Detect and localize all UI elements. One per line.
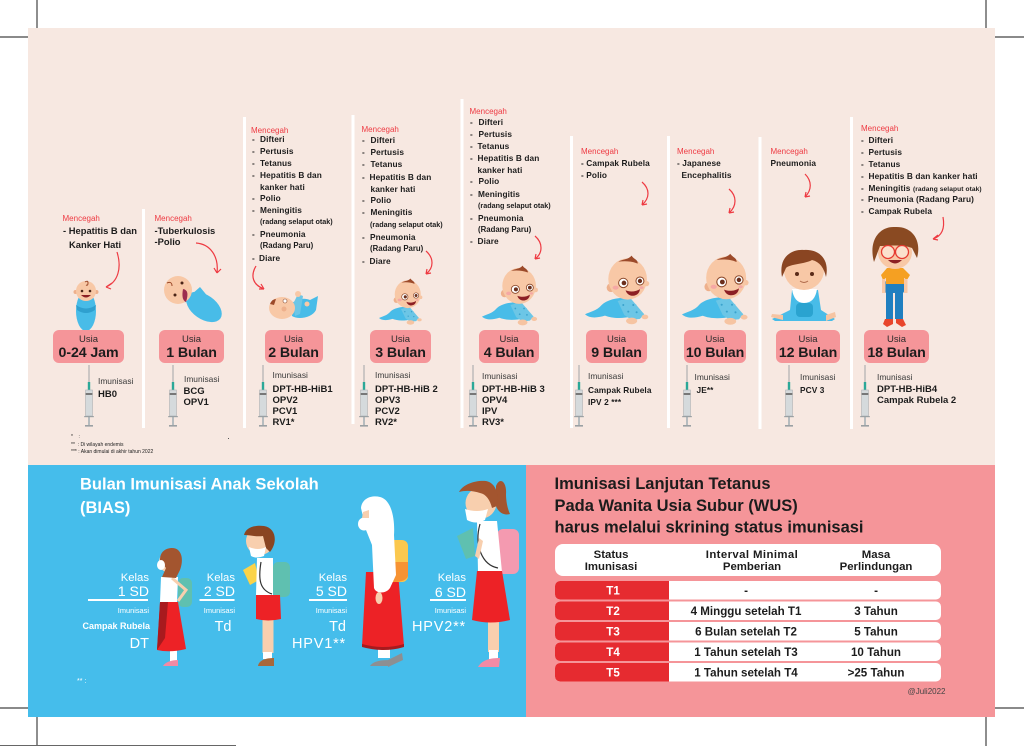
row T5: 1 Tahun setelah T4 xyxy=(694,666,798,680)
column: 3 Bulan: Usia xyxy=(391,334,411,345)
table header: Pemberian xyxy=(723,561,781,573)
age badge xyxy=(479,330,539,363)
row T3: T3 xyxy=(606,626,620,638)
column: 9 Bulan: Mencegah xyxy=(581,147,618,156)
column: 10 Bulan: 10 Bulan xyxy=(686,345,744,361)
row T4: T4 xyxy=(606,646,620,659)
column: 12 Bulan: 12 Bulan xyxy=(779,345,837,361)
column: 9 Bulan: - Campak Rubela xyxy=(581,158,650,168)
column: 3 Bulan: Tetanus xyxy=(370,159,403,169)
kelas 5 SD: Imunisasi xyxy=(316,606,347,615)
panel: jadwal imunisasi bayi xyxy=(28,28,995,465)
kelas 6 SD: 6 SD xyxy=(435,584,466,600)
column: 4 Bulan: kanker hati xyxy=(478,165,522,175)
column: 18 Bulan: Usia xyxy=(887,334,907,345)
column: 3 Bulan: OPV3 xyxy=(375,395,400,406)
column: 2 Bulan: 2 Bulan xyxy=(268,345,319,361)
kelas 1 SD: Campak Rubela xyxy=(82,621,151,631)
column: 1 Bulan: BCG xyxy=(184,386,205,397)
column: 2 Bulan: Usia xyxy=(284,334,304,345)
row T1: - xyxy=(744,584,748,598)
icon: crawling baby xyxy=(482,266,538,325)
column dividers xyxy=(142,99,853,429)
column: 10 Bulan: Usia xyxy=(705,334,725,345)
arrow xyxy=(196,243,221,273)
figure: siswi kelas 1 xyxy=(157,548,192,666)
arrow xyxy=(642,182,648,205)
column: 18 Bulan: Tetanus xyxy=(868,159,901,169)
column: 2 Bulan: - xyxy=(252,146,255,156)
column: 10 Bulan: Mencegah xyxy=(677,147,714,156)
column: 4 Bulan: Meningitis xyxy=(478,189,520,199)
column: 2 Bulan: Diare xyxy=(259,253,281,263)
column: 9 Bulan: 9 Bulan xyxy=(591,345,642,361)
column: 3 Bulan: (radang selaput otak) xyxy=(370,220,443,229)
column: 2 Bulan: - xyxy=(252,253,255,263)
column: 3 Bulan: Mencegah xyxy=(362,125,399,134)
kelas 1 SD: DT xyxy=(130,636,149,652)
column: 0-24 Jam: Usia xyxy=(79,334,99,345)
column: 18 Bulan: Mencegah xyxy=(861,124,898,133)
column: 3 Bulan: Imunisasi xyxy=(375,370,411,380)
kelas 2 SD xyxy=(200,572,235,635)
column: 0-24 Jam: HB0 xyxy=(98,389,117,400)
kelas 1 SD: 1 SD xyxy=(118,583,149,599)
column: 10 Bulan xyxy=(677,147,749,427)
column: 4 Bulan xyxy=(468,107,551,428)
column: 4 Bulan: OPV4 xyxy=(482,395,508,406)
column: 4 Bulan: Polio xyxy=(478,176,499,186)
kelas 1 SD: Kelas xyxy=(121,572,149,584)
kelas 6 SD xyxy=(412,572,466,635)
column: 4 Bulan: Usia xyxy=(499,334,519,345)
column: 18 Bulan: Hepatitis B dan kanker hati xyxy=(868,171,978,181)
column: 18 Bulan: - xyxy=(861,147,864,157)
kelas 5 SD: Kelas xyxy=(319,572,347,584)
column: 4 Bulan: Hepatitis B dan xyxy=(478,153,539,163)
column: 18 Bulan xyxy=(860,124,982,427)
column: 2 Bulan: Pneumonia xyxy=(260,229,306,239)
column: 3 Bulan: - xyxy=(362,135,365,145)
column: 2 Bulan: DPT-HB-HiB1 xyxy=(272,384,333,395)
table header: Interval Minimal xyxy=(706,549,798,561)
icon: crawling baby xyxy=(379,278,422,325)
column: 4 Bulan: 4 Bulan xyxy=(484,345,534,361)
column: 4 Bulan: Diare xyxy=(478,236,499,246)
column: 18 Bulan: Meningitis (radang selaput otak) xyxy=(868,183,982,193)
column: 2 Bulan: - xyxy=(252,170,255,180)
column: 3 Bulan: Hepatitis B dan xyxy=(370,172,431,182)
column: 1 Bulan: OPV1 xyxy=(184,397,210,408)
heading: BIAS xyxy=(80,476,319,517)
column: 10 Bulan: - Japanese xyxy=(677,158,721,168)
icon: syringe xyxy=(258,365,268,427)
arrow xyxy=(426,251,432,274)
row T3: 6 Bulan setelah T2 xyxy=(695,626,797,638)
age badge xyxy=(370,330,431,363)
age badge xyxy=(864,330,929,363)
icon: syringe xyxy=(359,365,369,427)
column: 3 Bulan: (Radang Paru) xyxy=(370,244,424,253)
column: 18 Bulan: - xyxy=(861,159,864,169)
column: 3 Bulan: Difteri xyxy=(370,135,395,145)
panel: imunisasi lanjutan tetanus xyxy=(526,465,995,717)
column: 4 Bulan: Tetanus xyxy=(478,141,510,151)
column: 18 Bulan: - xyxy=(861,206,864,216)
credit: @Juli2022 xyxy=(908,687,946,696)
column: 12 Bulan xyxy=(770,147,840,427)
row T4 xyxy=(555,642,941,661)
column: 2 Bulan: Imunisasi xyxy=(272,370,308,380)
kelas 6 SD: Kelas xyxy=(438,572,466,584)
column: 12 Bulan: Pneumonia xyxy=(770,158,816,168)
arrow xyxy=(729,189,735,213)
column: 9 Bulan: Imunisasi xyxy=(588,371,624,381)
row T2 xyxy=(555,602,941,620)
kelas 5 SD: 5 SD xyxy=(316,583,347,599)
column: 12 Bulan: PCV 3 xyxy=(800,385,825,395)
column: 10 Bulan: Imunisasi xyxy=(694,372,730,382)
column: 12 Bulan: Usia xyxy=(798,334,818,345)
column: 2 Bulan: kanker hati xyxy=(260,182,305,192)
column: 2 Bulan: Difteri xyxy=(260,134,285,144)
column: 4 Bulan: (radang selaput otak) xyxy=(478,201,551,210)
column: 2 Bulan: Hepatitis B dan xyxy=(260,170,322,180)
column: 1 Bulan: Imunisasi xyxy=(184,374,220,384)
icon: syringe xyxy=(860,365,870,427)
column: 2 Bulan: OPV2 xyxy=(272,395,298,406)
footnotes: * : xyxy=(71,434,80,440)
column: 18 Bulan: Pertusis xyxy=(868,147,902,157)
column: 9 Bulan: IPV 2 *** xyxy=(588,397,622,407)
column: 4 Bulan: Pertusis xyxy=(478,129,512,139)
column: 4 Bulan: - xyxy=(470,236,473,246)
column: 4 Bulan: - xyxy=(470,129,473,139)
column: 0-24 Jam: - Hepatitis B dan xyxy=(63,225,137,236)
column: 18 Bulan: Imunisasi xyxy=(877,372,913,382)
column: 3 Bulan: - xyxy=(362,207,365,217)
panel: BIAS: ** : xyxy=(77,678,86,685)
footnotes xyxy=(71,434,229,455)
icon: sitting baby xyxy=(771,250,836,321)
kelas 5 SD: Td xyxy=(329,619,346,635)
column: 18 Bulan: - xyxy=(861,183,864,193)
icon: syringe xyxy=(682,365,692,427)
column: 18 Bulan: Difteri xyxy=(868,135,893,145)
column: 4 Bulan: - xyxy=(470,153,473,163)
column: 18 Bulan: - xyxy=(861,135,864,145)
column: 3 Bulan: - xyxy=(362,147,365,157)
age badge xyxy=(265,330,323,363)
column: 3 Bulan: Diare xyxy=(370,256,391,266)
row T2: 3 Tahun xyxy=(854,605,898,618)
column: 4 Bulan: Pneumonia xyxy=(478,213,524,223)
heading: WUS: harus melalui skrining status imunisasi xyxy=(554,518,864,536)
arrow xyxy=(805,174,810,197)
column: 2 Bulan: - xyxy=(252,134,255,144)
column: 4 Bulan: RV3* xyxy=(482,417,504,428)
column: 1 Bulan: Usia xyxy=(182,334,202,345)
column: 4 Bulan: - xyxy=(470,189,473,199)
kelas 2 SD: Td xyxy=(215,619,232,635)
column: 4 Bulan: - xyxy=(470,141,473,151)
footnotes: ** : Di wilayah endemis xyxy=(71,442,124,448)
column: 2 Bulan: - xyxy=(252,158,255,168)
column: 4 Bulan: - xyxy=(470,117,473,127)
column: 3 Bulan: Meningitis xyxy=(370,207,413,217)
kelas 2 SD: 2 SD xyxy=(204,583,235,599)
age badge xyxy=(684,330,746,363)
column: 1 Bulan xyxy=(154,214,227,427)
column: 3 Bulan: 3 Bulan xyxy=(375,345,426,361)
kelas 6 SD: HPV2** xyxy=(412,619,466,635)
table header: Imunisasi xyxy=(585,561,637,573)
heading: WUS: Imunisasi Lanjutan Tetanus xyxy=(554,475,771,493)
column: 0-24 Jam xyxy=(53,214,137,427)
column: 3 Bulan: - xyxy=(362,232,365,242)
column: 0-24 Jam: Imunisasi xyxy=(98,376,134,386)
icon: crawling baby xyxy=(682,254,749,325)
icon: syringe xyxy=(468,365,478,427)
figure: siswa kelas 2 xyxy=(243,526,290,666)
column: 9 Bulan: Usia xyxy=(607,334,627,345)
row T3 xyxy=(555,622,941,640)
heading: BIAS: (BIAS) xyxy=(80,499,130,517)
kelas 1 SD: Imunisasi xyxy=(118,606,149,615)
column: 10 Bulan: JE** xyxy=(696,385,714,395)
row T4: 1 Tahun setelah T3 xyxy=(694,646,798,659)
kelas 5 SD xyxy=(292,572,347,652)
row T4: 10 Tahun xyxy=(851,646,901,659)
column: 1 Bulan: 1 Bulan xyxy=(166,345,217,361)
icon: swaddled baby xyxy=(74,281,98,331)
column: 2 Bulan: Meningitis xyxy=(260,205,302,215)
heading: WUS xyxy=(554,475,864,536)
age badge xyxy=(586,330,647,363)
column: 4 Bulan: Mencegah xyxy=(470,107,507,116)
column: 18 Bulan: Campak Rubela 2 xyxy=(877,395,956,406)
column: 2 Bulan: Pertusis xyxy=(260,146,294,156)
icon: syringe xyxy=(84,365,94,427)
column: 3 Bulan: - xyxy=(362,256,365,266)
icon: boy with glasses xyxy=(872,227,918,327)
arrow xyxy=(253,266,264,289)
column: 18 Bulan: - xyxy=(861,171,864,181)
panel: BIAS xyxy=(28,465,526,717)
column: 18 Bulan: 18 Bulan xyxy=(867,345,926,361)
arrow xyxy=(933,217,944,240)
column: 3 Bulan: kanker hati xyxy=(370,184,415,194)
column: 2 Bulan: - xyxy=(252,205,255,215)
footnotes: *** : Akan dimulai di akhir tahun 2022 xyxy=(71,449,153,455)
row T3: 5 Tahun xyxy=(854,626,898,638)
column: 2 Bulan: PCV1 xyxy=(272,406,298,417)
column: 4 Bulan: - xyxy=(470,176,473,186)
column: 2 Bulan: Tetanus xyxy=(260,158,292,168)
column: 12 Bulan: Mencegah xyxy=(770,147,808,156)
column: 4 Bulan: IPV xyxy=(482,406,498,417)
column: 2 Bulan: RV1* xyxy=(272,417,295,428)
figure: siswi kelas 6 xyxy=(457,481,519,667)
table header xyxy=(555,544,941,576)
row T2: T2 xyxy=(606,605,620,618)
column: 10 Bulan: Encephalitis xyxy=(682,170,732,180)
kelas 2 SD: Kelas xyxy=(207,572,235,584)
column: 2 Bulan: Polio xyxy=(260,193,281,203)
column: 2 Bulan xyxy=(251,126,333,428)
row T1: T1 xyxy=(606,584,620,598)
age badge xyxy=(159,330,224,363)
heading: WUS: Pada Wanita Usia Subur (WUS) xyxy=(554,497,798,515)
column: 18 Bulan: DPT-HB-HiB4 xyxy=(877,384,938,395)
column: 0-24 Jam: Mencegah xyxy=(62,214,100,223)
column: 9 Bulan: Campak Rubela xyxy=(588,385,652,395)
table header: Perlindungan xyxy=(840,561,912,573)
column: 2 Bulan: - xyxy=(252,193,255,203)
heading: BIAS: Bulan Imunisasi Anak Sekolah xyxy=(80,476,319,494)
column: 12 Bulan: Imunisasi xyxy=(800,372,836,382)
column: 3 Bulan: PCV2 xyxy=(375,406,400,417)
column: 3 Bulan: Polio xyxy=(370,195,391,205)
arrow xyxy=(106,252,119,289)
column: 4 Bulan: Imunisasi xyxy=(482,371,518,381)
column: 3 Bulan: - xyxy=(362,172,365,182)
table: status imunisasi xyxy=(555,544,941,682)
column: 4 Bulan: (Radang Paru) xyxy=(478,225,532,234)
column: 0-24 Jam: Kanker Hati xyxy=(69,239,121,250)
column: 9 Bulan xyxy=(574,147,652,427)
column: 2 Bulan: (Radang Paru) xyxy=(260,241,314,250)
row T1 xyxy=(555,581,941,600)
kelas 6 SD: Imunisasi xyxy=(435,606,466,615)
age badge xyxy=(776,330,840,363)
row T5: >25 Tahun xyxy=(848,666,904,680)
row T2: 4 Minggu setelah T1 xyxy=(691,605,802,618)
icon: syringe xyxy=(784,365,794,427)
figure: siswi berhijab kelas 5 xyxy=(358,496,408,667)
column: 3 Bulan: Pneumonia xyxy=(370,232,416,242)
column: 4 Bulan: Difteri xyxy=(478,117,503,127)
column: 2 Bulan: (radang selaput otak) xyxy=(260,217,333,226)
column: 1 Bulan: -Polio xyxy=(154,236,181,247)
column: 18 Bulan: - xyxy=(861,194,864,204)
column: 4 Bulan: - xyxy=(470,213,473,223)
column: 0-24 Jam: 0-24 Jam xyxy=(59,345,118,361)
column: 3 Bulan: DPT-HB-HiB 2 xyxy=(375,384,438,395)
column: 18 Bulan: Pneumonia (Radang Paru) xyxy=(868,194,974,204)
age badge xyxy=(53,330,124,363)
column: 3 Bulan: - xyxy=(362,195,365,205)
icon: syringe xyxy=(168,365,178,427)
kelas 2 SD: Imunisasi xyxy=(204,606,235,615)
row T5: T5 xyxy=(606,666,620,680)
column: 3 Bulan xyxy=(359,125,443,428)
column: 18 Bulan: Campak Rubela xyxy=(868,206,932,216)
column: 2 Bulan: Mencegah xyxy=(251,126,288,135)
row T5 xyxy=(555,663,941,682)
arrow xyxy=(535,236,541,259)
column: 4 Bulan: DPT-HB-HiB 3 xyxy=(482,384,545,395)
icon: swaddled baby xyxy=(164,276,227,328)
icon: lying baby xyxy=(269,291,318,319)
column: 2 Bulan: - xyxy=(252,229,255,239)
table header: Masa xyxy=(862,549,891,561)
column: 1 Bulan: Mencegah xyxy=(154,214,192,223)
icon: syringe xyxy=(574,365,584,427)
kelas 1 SD xyxy=(82,572,151,652)
column: 1 Bulan: -Tuberkulosis xyxy=(154,225,215,236)
column: 3 Bulan: RV2* xyxy=(375,417,397,428)
column: 3 Bulan: - xyxy=(362,159,365,169)
row T1: - xyxy=(874,584,878,598)
column: 9 Bulan: - Polio xyxy=(581,170,607,180)
column: 3 Bulan: Pertusis xyxy=(370,147,404,157)
kelas 5 SD: HPV1** xyxy=(292,636,346,652)
table header: Status xyxy=(594,549,628,561)
icon: crawling baby xyxy=(585,256,649,324)
